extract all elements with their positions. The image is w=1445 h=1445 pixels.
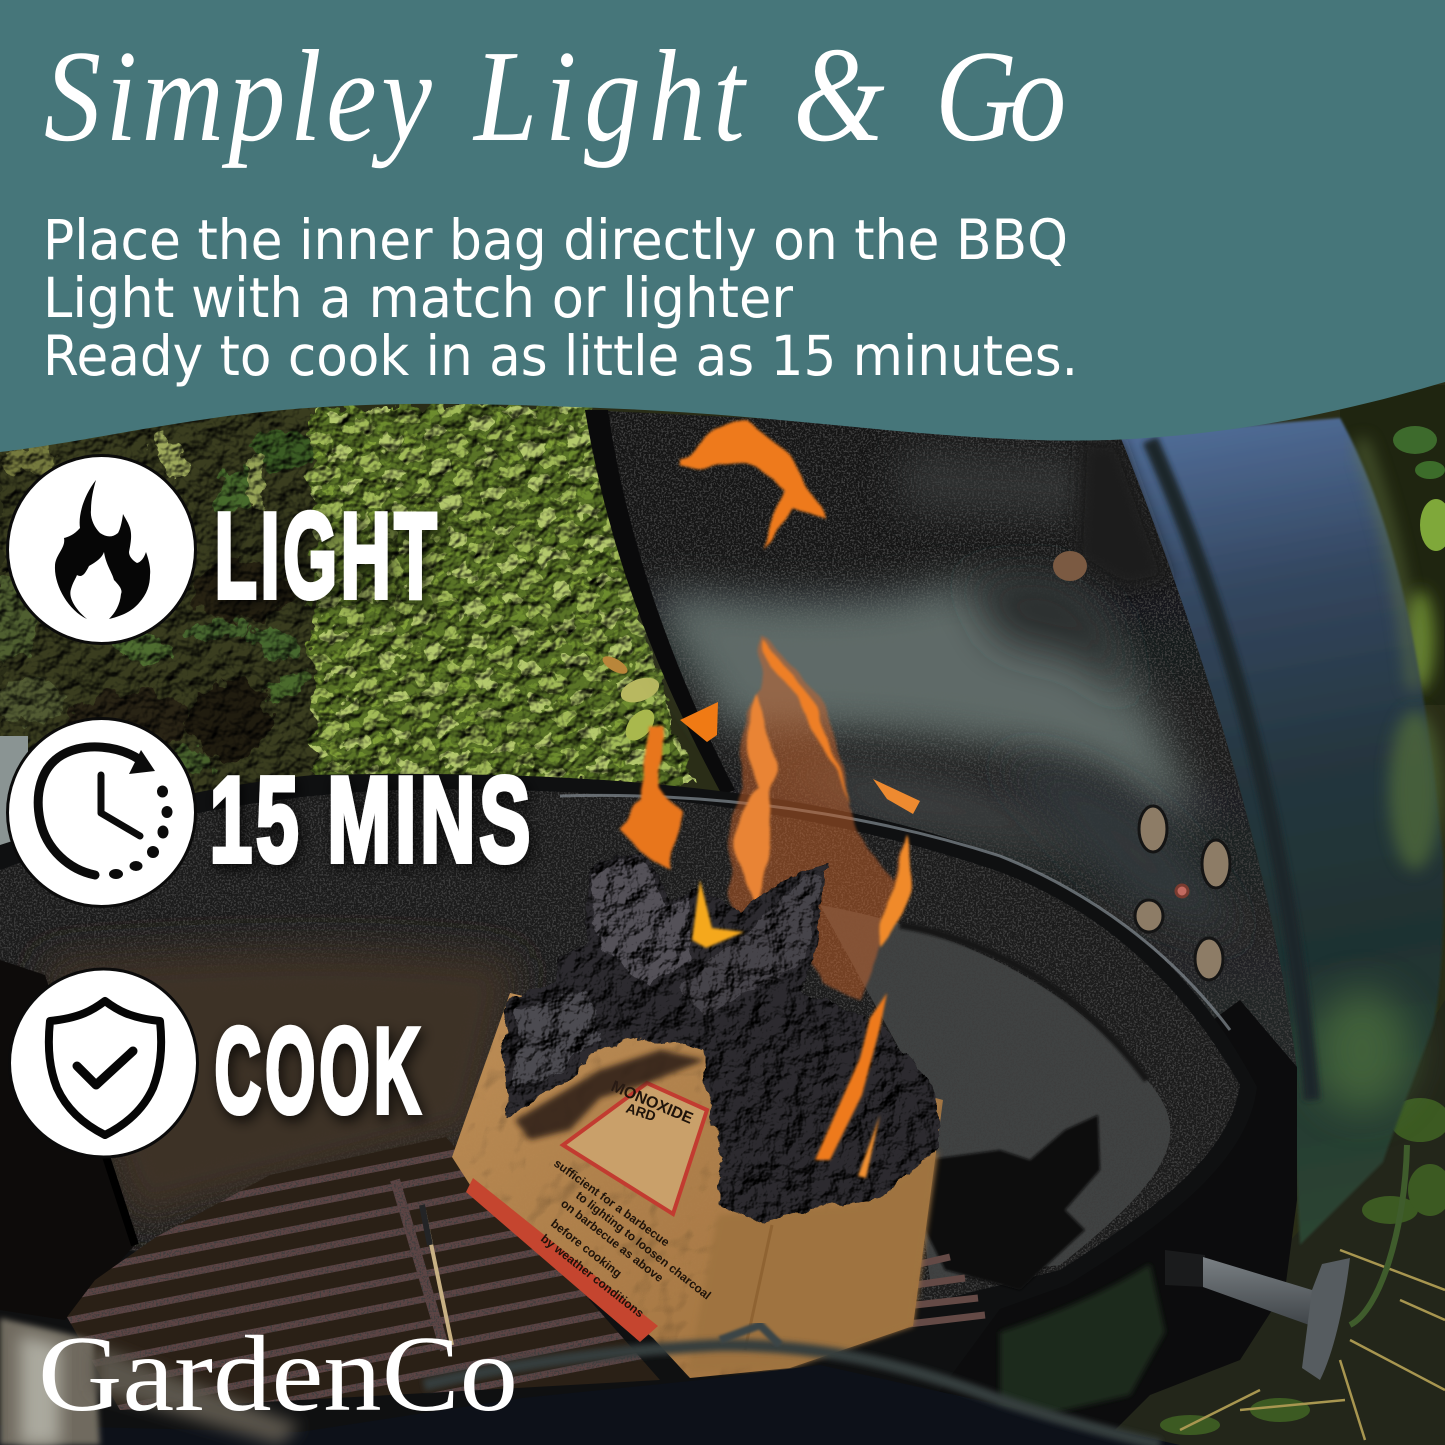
description text: Light with a match or lighter bbox=[43, 266, 793, 330]
grill bowl interior and rim bbox=[0, 774, 1257, 1445]
cooking grate bbox=[67, 1137, 660, 1410]
cooking grate right side bbox=[900, 1257, 985, 1325]
burnt charcoal bbox=[503, 849, 940, 1222]
title: Go bbox=[935, 24, 1063, 169]
window frame behind bowl bbox=[0, 736, 28, 846]
foreground bowl edge and wire bbox=[0, 1318, 1180, 1445]
lid vents bbox=[1135, 806, 1230, 980]
flames in front of bag bbox=[692, 880, 887, 1178]
hedge bbox=[312, 405, 695, 785]
bowl green reflection bbox=[1000, 1264, 1165, 1425]
label: 15 mins: 15 MINS bbox=[210, 751, 534, 888]
warning strip bbox=[466, 1178, 658, 1342]
bag warning text: on barbecue as above bbox=[558, 1196, 666, 1285]
brand logo text: GardenCo bbox=[38, 1315, 518, 1434]
description text bbox=[43, 208, 1078, 388]
description text: Place the inner bag directly on the BBQ bbox=[43, 208, 1068, 272]
description text: Ready to cook in as little as 15 minutes. bbox=[43, 324, 1078, 388]
icon: flame bbox=[8, 456, 196, 644]
title: & bbox=[793, 19, 914, 170]
title: Simpley bbox=[44, 24, 469, 169]
label: light: LIGHT bbox=[214, 488, 440, 625]
charcoal bag bbox=[452, 849, 943, 1378]
lit leaves near lid bbox=[600, 653, 663, 746]
label: cook: COOK bbox=[214, 1003, 424, 1139]
bag warning text: before cooking bbox=[548, 1216, 625, 1280]
flames behind charcoal bbox=[618, 420, 920, 1000]
grill lid: outer shell bbox=[1117, 418, 1443, 1245]
bag warning text bbox=[538, 1078, 714, 1321]
header banner bbox=[0, 0, 1445, 452]
bag warning text: sufficient for a barbecue bbox=[551, 1156, 672, 1250]
bag warning text: MONOXIDE bbox=[608, 1078, 696, 1128]
grill bowl exterior bbox=[900, 1000, 1297, 1445]
bag warning text: to lighting to loosen charcoal bbox=[573, 1188, 714, 1302]
bag warning text: by weather conditions bbox=[538, 1231, 647, 1321]
icon: shield with check bbox=[10, 969, 198, 1157]
right foliage bbox=[1100, 385, 1445, 1445]
grill handle bbox=[1165, 1145, 1407, 1380]
title: Light bbox=[472, 24, 788, 169]
icon: clock bbox=[8, 718, 196, 906]
scorch marks bbox=[515, 1050, 705, 1140]
grill lid: inner surface bbox=[585, 410, 1297, 1130]
warning panel bbox=[563, 1083, 707, 1214]
bag warning text: ARD bbox=[624, 1100, 658, 1124]
